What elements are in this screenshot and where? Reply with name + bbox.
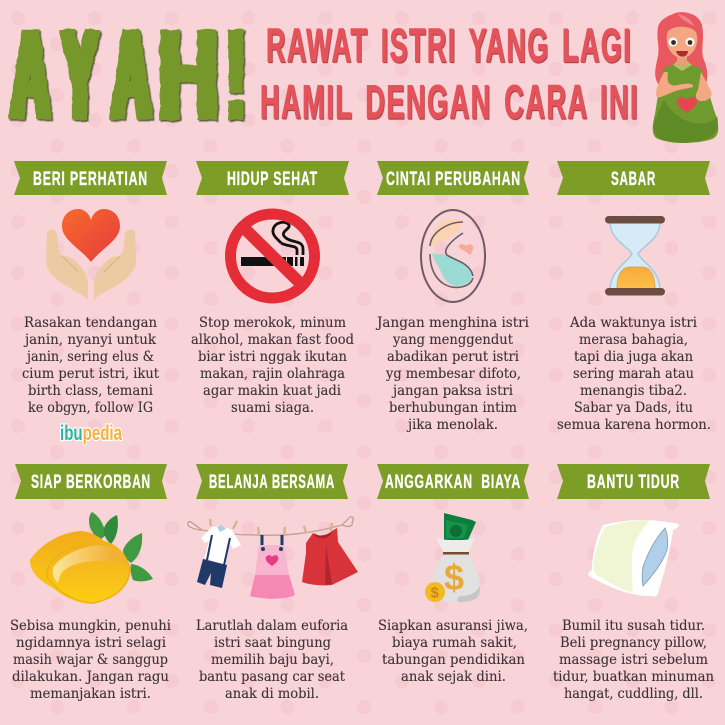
text: hidup sehat: suami siaga.	[231, 400, 314, 416]
text: cintai perubahan	[375, 315, 530, 433]
text: cintai perubahan: berhubungan intim	[389, 400, 517, 416]
icon: money bag: $	[430, 584, 440, 602]
text: sabar: sering marah atau	[573, 366, 694, 382]
ribbon: belanja bersama: BELANJA BERSAMA	[209, 472, 335, 493]
icon: pillow	[588, 520, 679, 597]
icon: money bag: $	[444, 557, 464, 598]
ribbon: cintai perubahan	[377, 161, 529, 195]
text: siap berkorban	[10, 618, 172, 702]
text: belanja bersama: istri saat bingung	[214, 635, 331, 651]
text: belanja bersama: Larutlah dalam euforia	[196, 618, 348, 634]
text: beri perhatian	[22, 315, 160, 416]
text: siap berkorban: masih wajar & sanggup	[13, 652, 168, 668]
ribbon: sabar	[557, 161, 710, 195]
icon: money bag	[425, 513, 480, 602]
text: hidup sehat: alkohol, makan fast food	[191, 332, 354, 348]
text: bantu tidur: hangat, cuddling, dll.	[564, 686, 703, 702]
illustration: pregnant mother	[653, 12, 718, 143]
text: bantu tidur: massage istri sebelum	[559, 652, 708, 668]
text: siap berkorban: ngidamnya istri selagi	[16, 635, 167, 651]
text: sabar: semua karena hormon.	[557, 417, 711, 433]
panel: sabar	[557, 161, 711, 433]
panel: cintai perubahan	[375, 161, 530, 433]
text: belanja bersama: memilih baju bayi,	[211, 652, 334, 668]
icon: baby clothes on a clothesline	[188, 517, 358, 599]
text: belanja bersama: anak di mobil.	[225, 686, 319, 702]
panel: anggarkan biaya	[377, 464, 529, 685]
ribbon: hidup sehat: HIDUP SEHAT	[227, 169, 318, 190]
ribbon: anggarkan biaya	[377, 464, 529, 499]
text: siap berkorban: memanjakan istri.	[30, 686, 151, 702]
ribbon: beri perhatian	[14, 161, 167, 195]
title: AYAH!: !	[227, 4, 245, 146]
text: cintai perubahan: Jangan menghina istri	[375, 315, 530, 331]
text: cintai perubahan: abadikan perut istri	[387, 349, 520, 365]
ribbon: bantu tidur	[557, 464, 710, 499]
panel: siap berkorban	[10, 464, 172, 702]
text: anggarkan biaya: anak sejak dini.	[401, 669, 506, 685]
text: beri perhatian: cium perut istri, ikut	[22, 366, 160, 382]
text: siap berkorban: dilakukan. Jangan ragu	[12, 669, 169, 685]
icon: mango	[30, 512, 153, 604]
text: cintai perubahan: jika menolak.	[406, 417, 498, 433]
panel: beri perhatian	[14, 161, 167, 445]
text: anggarkan biaya	[378, 618, 528, 685]
text: hidup sehat: biar istri nggak ikutan	[198, 349, 347, 365]
text: sabar: Ada waktunya istri	[569, 315, 698, 331]
ribbon: hidup sehat	[196, 161, 349, 195]
text: sabar	[557, 315, 711, 433]
panel: belanja bersama	[188, 464, 358, 702]
text: beri perhatian: janin, sering elus &	[25, 349, 154, 365]
title: AYAH!: AYA	[11, 4, 150, 146]
panel: bantu tidur	[553, 464, 714, 702]
text: hidup sehat	[191, 315, 354, 416]
icon: no smoking	[230, 214, 314, 298]
text: sabar: merasa bahagia,	[579, 332, 688, 348]
text: beri perhatian: Rasakan tendangan	[24, 315, 157, 331]
title: AYAH!: H	[158, 4, 219, 146]
text: anggarkan biaya: tabungan pendidikan	[382, 652, 525, 668]
title: AYAH!	[11, 4, 245, 146]
text: sabar: tapi dia juga akan	[574, 349, 693, 365]
text: cintai perubahan: yg membesar difoto,	[385, 366, 521, 382]
ribbon: siap berkorban	[15, 464, 167, 499]
ribbon: belanja bersama	[196, 464, 348, 499]
text: anggarkan biaya: Siapkan asuransi jiwa,	[378, 618, 528, 634]
text: hidup sehat: agar makin kuat jadi	[203, 383, 342, 399]
ribbon: siap berkorban: SIAP BERKORBAN	[31, 472, 151, 493]
text: bantu tidur: Bumil itu susah tidur.	[562, 618, 705, 634]
text: bantu tidur	[553, 618, 714, 702]
text: hidup sehat: makan, rajin olahraga	[200, 366, 345, 382]
text: bantu tidur: Beli pregnancy pillow,	[560, 635, 707, 651]
panel: hidup sehat	[191, 161, 354, 416]
text: beri perhatian: ke obgyn, follow IG	[28, 400, 153, 416]
text: cintai perubahan: yang menggendut	[392, 332, 514, 348]
text: belanja bersama: bantu pasang car seat	[199, 669, 346, 685]
text: beri perhatian: birth class, temani	[28, 383, 154, 399]
text: cintai perubahan: jangan paksa istri	[391, 383, 514, 399]
text: belanja bersama	[196, 618, 348, 702]
text: sabar: menangis tiba2.	[580, 383, 687, 399]
icon: hourglass	[605, 216, 665, 296]
text: sabar: Sabar ya Dads, itu	[574, 400, 693, 416]
text: hidup sehat: Stop merokok, minum	[199, 315, 346, 331]
icon: heart in hands	[46, 209, 136, 300]
ribbon: sabar: SABAR	[611, 169, 656, 190]
icon: pregnant woman in oval	[421, 210, 485, 302]
text: bantu tidur: tidur, buatkan minuman	[553, 669, 714, 685]
text: anggarkan biaya: biaya rumah sakit,	[392, 635, 517, 651]
logo: ibupedia: ibupedia	[60, 422, 122, 445]
ribbon: beri perhatian: BERI PERHATIAN	[33, 169, 148, 190]
ribbon: anggarkan biaya: ANGGARKAN BIAYA	[385, 472, 521, 493]
ribbon: cintai perubahan: CINTAI PERUBAHAN	[386, 169, 521, 190]
text: beri perhatian: janin, nyanyi untuk	[23, 332, 157, 348]
text: siap berkorban: Sebisa mungkin, penuhi	[10, 618, 172, 634]
